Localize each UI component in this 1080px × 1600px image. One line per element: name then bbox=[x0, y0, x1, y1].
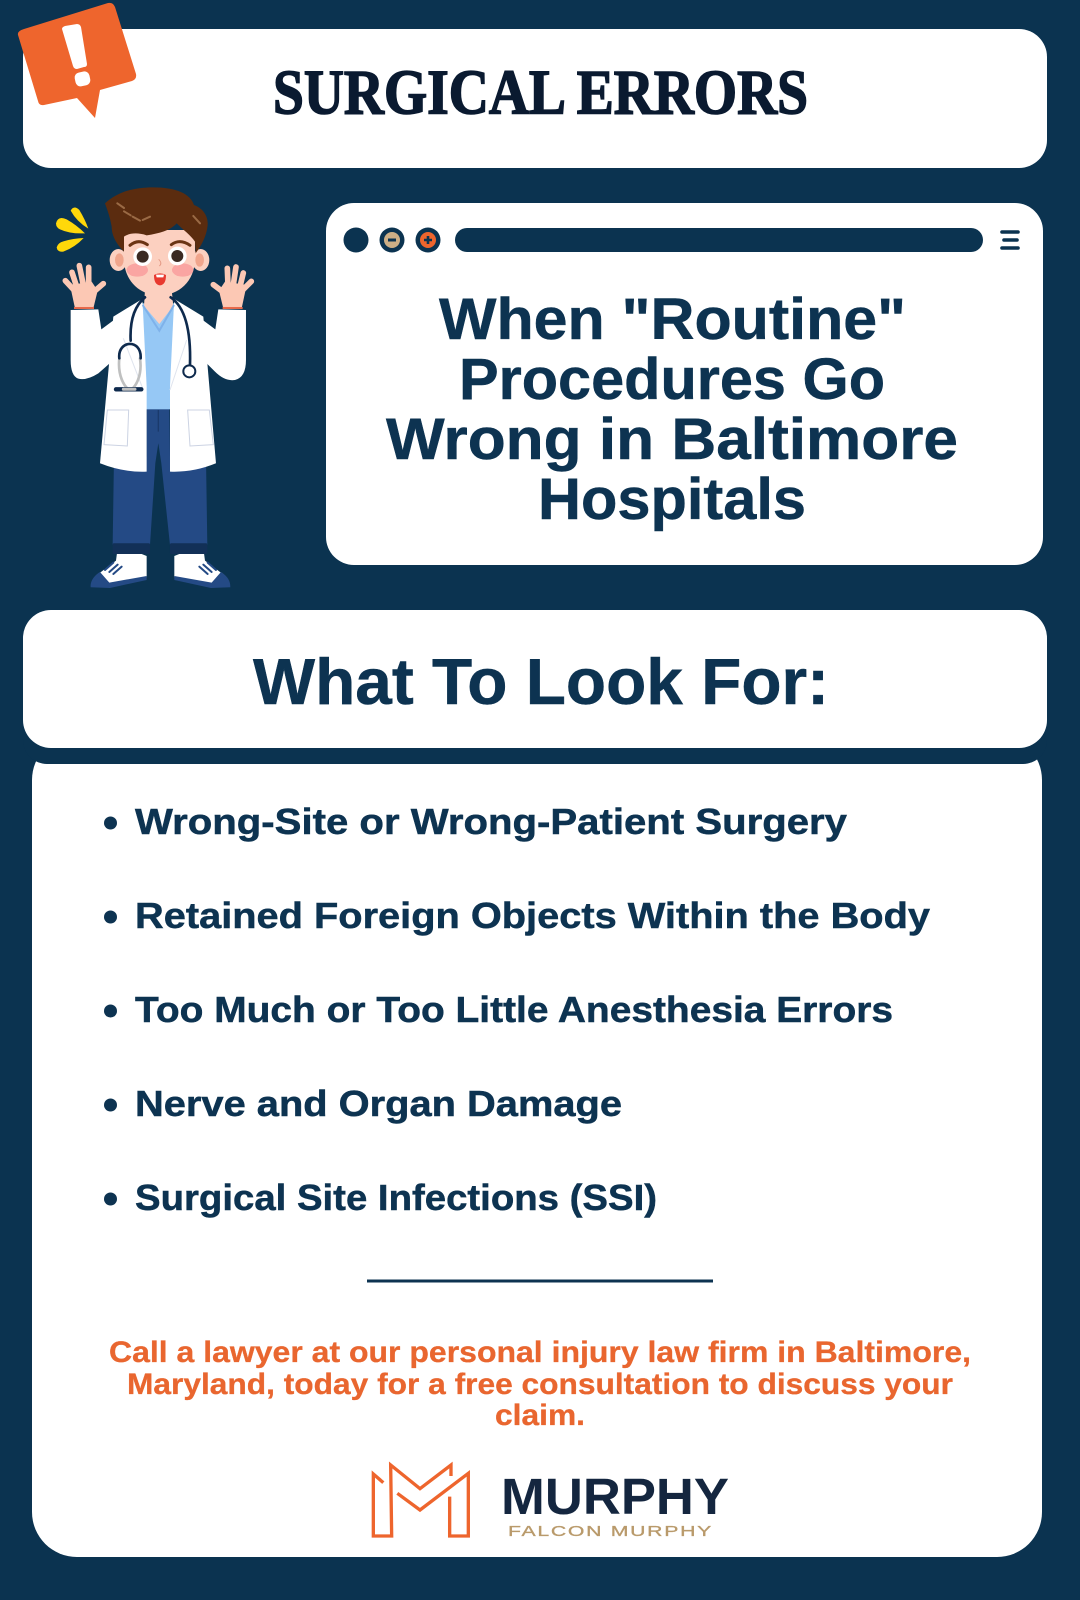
call to action bbox=[109, 1336, 971, 1432]
illustration: surprised doctor bbox=[56, 187, 251, 588]
lab coat bbox=[71, 299, 246, 472]
subtitle text: Hospitals bbox=[538, 467, 806, 532]
panel: what to look for heading: What To Look For: bbox=[253, 645, 829, 718]
logo: Falcon Murphy: MURPHY bbox=[501, 1468, 729, 1525]
logo: Falcon Murphy bbox=[373, 1465, 729, 1540]
call to action: Call a lawyer at our personal injury law firm in Baltimore, bbox=[109, 1336, 971, 1369]
subtitle text: Procedures Go bbox=[459, 347, 885, 412]
subtitle text: When "Routine" bbox=[439, 287, 906, 352]
logo: Falcon Murphy: FALCON MURPHY bbox=[508, 1523, 713, 1540]
shoes bbox=[91, 551, 230, 588]
browser toolbar bbox=[344, 228, 1018, 252]
bullet list: Nerve and Organ Damage bbox=[135, 1083, 622, 1124]
trousers bbox=[113, 408, 207, 554]
panel: browser window subtitle bbox=[326, 203, 1043, 565]
bullet list: Wrong-Site or Wrong-Patient Surgery bbox=[135, 801, 847, 842]
scrub top bbox=[143, 303, 174, 409]
head bbox=[105, 187, 209, 295]
call to action: Maryland, today for a free consultation to discuss your bbox=[127, 1368, 953, 1401]
panel: title bbox=[23, 29, 1047, 168]
heading: surgical errors: SURGICAL ERRORS bbox=[273, 56, 808, 128]
icon: yellow surprise marks bbox=[56, 207, 88, 252]
bullet list: Retained Foreign Objects Within the Body bbox=[135, 895, 930, 936]
icon: alert speech bubble bbox=[18, 3, 136, 118]
subtitle text: Wrong in Baltimore bbox=[386, 407, 958, 472]
panel: what to look for heading bbox=[23, 610, 1047, 748]
stethoscope bbox=[116, 297, 195, 389]
neck bbox=[144, 290, 173, 324]
subtitle text bbox=[386, 287, 958, 532]
right hand bbox=[213, 267, 251, 309]
bullet list: Too Much or Too Little Anesthesia Errors bbox=[135, 989, 893, 1030]
bullet list bbox=[104, 801, 930, 1218]
call to action: claim. bbox=[495, 1399, 585, 1432]
bullet list: Surgical Site Infections (SSI) bbox=[135, 1177, 657, 1218]
panel: checklist body bbox=[23, 700, 1047, 1557]
left hand bbox=[65, 266, 103, 309]
